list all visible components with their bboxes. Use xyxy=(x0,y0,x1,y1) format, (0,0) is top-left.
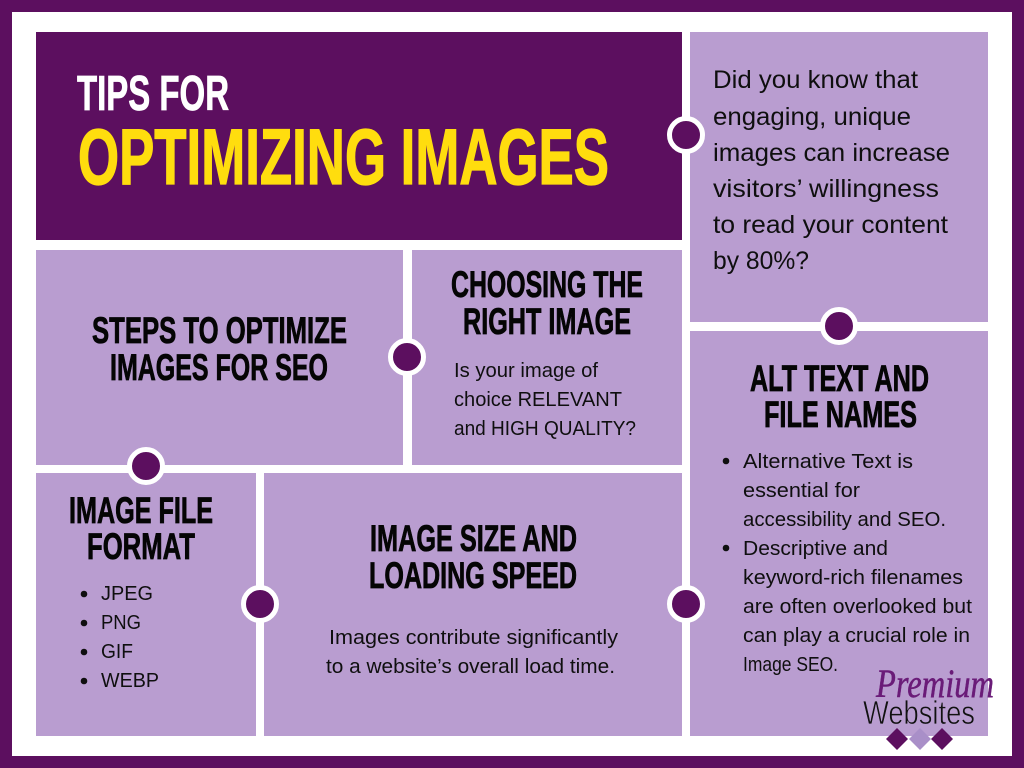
connector: steps to choosing xyxy=(390,340,424,374)
heading: optimizing images: OPTIMIZING IMAGES xyxy=(78,112,609,201)
connector: title to fact xyxy=(670,118,702,152)
heading: image file format: FORMAT xyxy=(87,525,195,567)
text: did you know fact: engaging, unique xyxy=(713,103,911,131)
heading: alt text and file names: FILE NAMES xyxy=(764,393,917,435)
heading: steps to optimize images for seo: IMAGES FOR SEO xyxy=(110,346,328,388)
text: did you know fact: Did you know that xyxy=(713,66,918,94)
connector: size to alt text xyxy=(670,588,702,620)
heading: alt text and file names: ALT TEXT AND xyxy=(750,357,929,399)
logo: premium websites xyxy=(863,661,994,750)
heading: image size and loading speed xyxy=(369,517,577,596)
heading: image file format xyxy=(69,489,213,567)
list: alt text tips: keyword-rich filenames xyxy=(743,567,963,589)
text: did you know fact: visitors’ willingness xyxy=(713,175,939,203)
logo diamonds xyxy=(886,728,953,750)
text: relevance question: and HIGH QUALITY? xyxy=(454,418,636,440)
heading: steps to optimize images for seo xyxy=(92,309,347,388)
heading: image size and loading speed: IMAGE SIZE AND xyxy=(370,517,577,559)
text: did you know fact: by 80%? xyxy=(713,247,809,275)
list: alt text tips: can play a crucial role in xyxy=(743,625,970,647)
panel: choosing the right image xyxy=(412,250,682,465)
text: load time: to a website’s overall load time. xyxy=(326,656,615,678)
logo word: premium: Premium xyxy=(875,661,994,706)
heading: choosing the right image xyxy=(451,263,643,342)
panel: image size and loading speed xyxy=(264,473,682,736)
text: did you know fact xyxy=(713,66,950,275)
connector: steps to file format xyxy=(130,450,162,482)
text: relevance question xyxy=(454,360,636,440)
connector: file format to size xyxy=(244,588,276,620)
text: relevance question: Is your image of xyxy=(454,360,598,382)
heading: choosing the right image: RIGHT IMAGE xyxy=(463,300,631,342)
list: alt text tips: Image SEO. xyxy=(743,654,838,676)
heading: steps to optimize images for seo: STEPS TO OPTIMIZE xyxy=(92,309,347,351)
list: file formats: GIF xyxy=(101,641,133,663)
list: alt text tips: Alternative Text is xyxy=(743,451,913,473)
list: alt text tips: essential for xyxy=(743,480,860,502)
connector: fact to alt text xyxy=(822,310,856,342)
panel: did you know xyxy=(690,32,988,322)
list: file formats: PNG xyxy=(101,612,141,634)
heading: image file format: IMAGE FILE xyxy=(69,489,213,531)
heading: choosing the right image: CHOOSING THE xyxy=(451,263,643,305)
list: alt text tips: accessibility and SEO. xyxy=(743,509,946,531)
text: relevance question: choice RELEVANT xyxy=(454,389,622,411)
logo word: websites: Websites xyxy=(863,694,975,731)
text: load time xyxy=(326,627,618,678)
list: alt text tips: are often overlooked but xyxy=(743,596,972,618)
heading: tips for: TIPS FOR xyxy=(77,67,229,121)
heading: alt text and file names xyxy=(750,357,929,435)
text: did you know fact: to read your content xyxy=(713,211,948,239)
list: alt text tips xyxy=(723,451,972,676)
heading: image size and loading speed: LOADING SPEED xyxy=(369,554,577,596)
list: file formats xyxy=(81,583,159,692)
list: alt text tips: Descriptive and xyxy=(743,538,888,560)
panel: steps to optimize xyxy=(36,250,403,465)
text: load time: Images contribute significantly xyxy=(329,627,618,649)
list: file formats: JPEG xyxy=(101,583,153,605)
panel: alt text and file names xyxy=(690,331,988,736)
list: file formats: WEBP xyxy=(101,670,159,692)
panel: title xyxy=(36,32,682,240)
text: did you know fact: images can increase xyxy=(713,139,950,167)
panel: image file format xyxy=(36,473,256,736)
